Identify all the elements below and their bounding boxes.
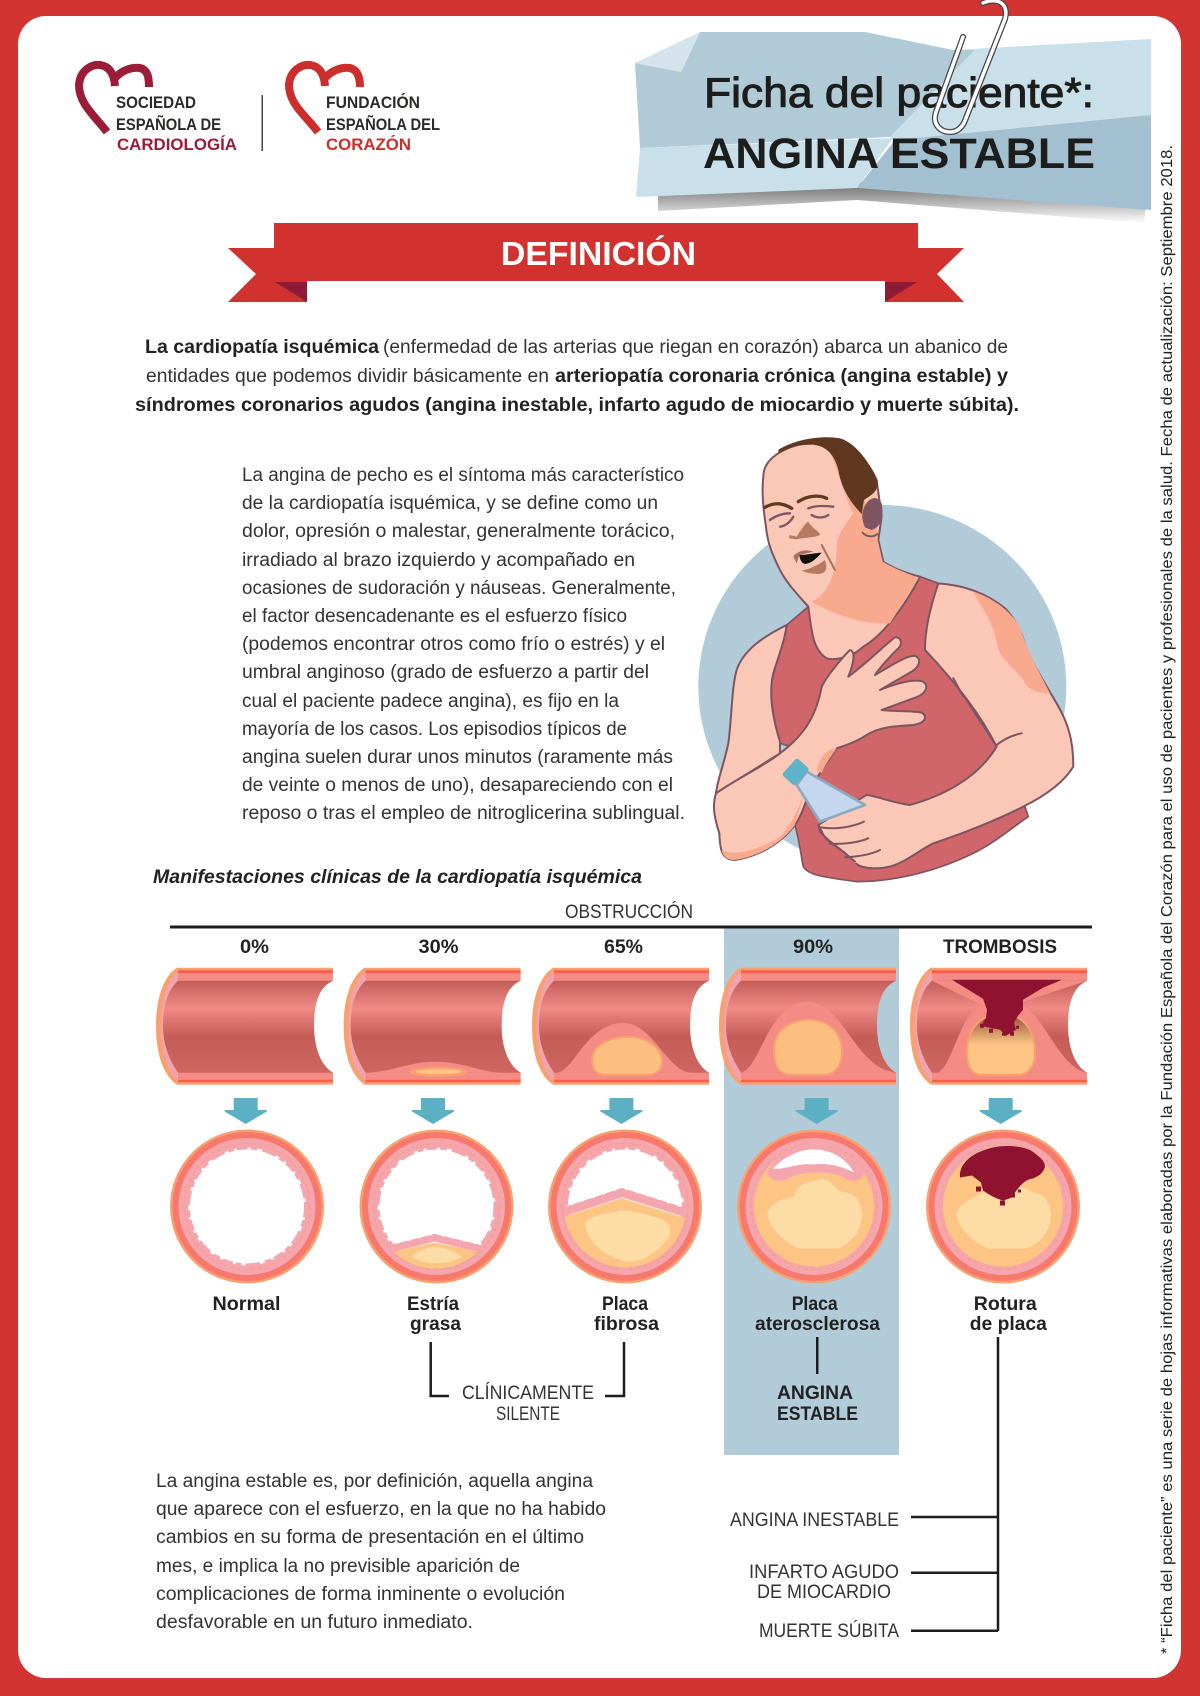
bracket: clinically silent: CLÍNICAMENTE: [462, 1383, 594, 1404]
text block: angina de pecho: de la cardiopatía isquémica, y se define como un: [242, 493, 658, 514]
logo: Sociedad Española de Cardiología: [79, 65, 237, 154]
text block: angina de pecho: reposo o tras el empleo de nitroglicerina sublingual.: [242, 803, 685, 824]
bracket: clinically silent: [431, 1342, 624, 1425]
stage labels: grasa: [410, 1314, 461, 1335]
stage labels: Placa: [792, 1294, 838, 1315]
stage labels: Rotura: [974, 1294, 1037, 1315]
cross section: fibrous plaque: [548, 1130, 702, 1284]
intro text block: La cardiopatía isquémica: [145, 337, 379, 358]
cross section: plaque rupture: [926, 1130, 1080, 1284]
artery section: atherosclerotic plaque: [719, 968, 896, 1085]
arrows from sections to cross sections: [225, 1098, 1022, 1124]
head and chest: [763, 441, 920, 659]
rupture outcomes tree: DE MIOCARDIO: [757, 1582, 891, 1603]
text block: angina de pecho: cual el paciente padece angina), es fijo en la: [242, 691, 619, 712]
intro text block: síndromes coronarios agudos (angina inestable, infarto agudo de miocardio y muerte súbita).: [135, 395, 1019, 416]
intro text block: arteriopatía coronaria crónica (angina estable) y: [555, 366, 1008, 387]
forearm and hand on chest: [714, 637, 926, 860]
text block: angina de pecho: de veinte o menos de uno), desapareciendo con el: [242, 775, 673, 796]
stage labels: de placa: [970, 1314, 1047, 1335]
artery section: fatty streak: [344, 968, 521, 1085]
obstruction percentages: TROMBOSIS: [943, 937, 1057, 958]
title line 1: Ficha del paciente*:: [704, 69, 1094, 116]
rupture outcomes tree: INFARTO AGUDO: [749, 1562, 899, 1583]
stage labels: Placa: [602, 1294, 648, 1315]
heading ribbon: Definición: DEFINICIÓN: [501, 235, 696, 272]
obstruction percentages: 65%: [604, 937, 643, 958]
stage labels: fibrosa: [594, 1314, 659, 1335]
obstruction percentages: 90%: [793, 937, 833, 958]
text block: angina de pecho: ocasiones de sudoración y náuseas. Generalmente,: [242, 578, 676, 599]
text block: angina estable: que aparece con el esfuerzo, en la que no ha habido: [156, 1499, 606, 1520]
text block: angina de pecho: (podemos encontrar otros como frío o estrés) y el: [242, 634, 665, 655]
stable angina outcome: ANGINA: [777, 1383, 853, 1404]
obstruction percentages: 0%: [240, 937, 269, 958]
intro text block: entidades que podemos dividir básicamente en: [146, 366, 549, 387]
artery section: thrombosis: [910, 968, 1087, 1085]
chart heading: Manifestaciones clínicas de la cardiopatía isquémica: [153, 866, 642, 888]
label: obstrucción: OBSTRUCCIÓN: [565, 901, 693, 923]
heading ribbon: Definición: [228, 223, 964, 302]
text block: angina estable: La angina estable es, por definición, aquella angina: [156, 1471, 593, 1492]
artery section: normal: [156, 968, 333, 1085]
rupture outcomes tree: [730, 1337, 998, 1642]
logo: Sociedad Española de Cardiología: CARDIOLOGÍA: [117, 135, 237, 154]
bracket: clinically silent: SILENTE: [496, 1404, 560, 1425]
hair: [778, 437, 878, 514]
text block: angina estable: cambios en su forma de presentación en el último: [156, 1527, 584, 1548]
logo: Sociedad Española de Cardiología: ESPAÑOLA DE: [116, 114, 221, 134]
stable angina outcome: [777, 1337, 858, 1425]
artery section: fibrous plaque: [532, 968, 709, 1085]
tank top: [770, 577, 1028, 882]
stage labels: Estría: [407, 1294, 459, 1315]
text block: angina de pecho: mayoría de los casos. Los episodios típicos de: [242, 719, 627, 740]
text block: angina estable: mes, e implica la no previsible aparición de: [156, 1556, 520, 1577]
stage labels: Normal: [212, 1294, 280, 1315]
logo: Fundación Española del Corazón: CORAZÓN: [326, 135, 411, 154]
obstruction percentages: 30%: [418, 937, 459, 958]
title card: folded paper: [635, 32, 1151, 223]
illustration: man with chest pain holding a bottle: [698, 437, 1073, 882]
text block: angina de pecho: irradiado al brazo izquierdo y acompañado en: [242, 550, 635, 571]
rupture outcomes tree: ANGINA INESTABLE: [730, 1510, 899, 1531]
logo: Fundación Española del Corazón: ESPAÑOLA DEL: [326, 114, 440, 134]
intro text block: (enfermedad de las arterias que riegan en corazón) abarca un abanico de: [383, 337, 1008, 358]
right arm: [818, 583, 1073, 868]
cross section: atherosclerotic plaque: [737, 1130, 891, 1284]
icon: paper clip: [935, 1, 1006, 132]
cross section: fatty streak: [360, 1130, 514, 1284]
obstruction axis: [170, 926, 1092, 928]
logo: Sociedad Española de Cardiología: SOCIEDAD: [116, 93, 196, 112]
logo: Fundación Española del Corazón: [289, 65, 440, 154]
highlight column: 90%: [724, 928, 899, 1455]
face features: [765, 496, 835, 570]
logo: Fundación Española del Corazón: FUNDACIÓN: [326, 93, 420, 112]
rupture outcomes tree: MUERTE SÚBITA: [759, 1620, 899, 1642]
logo divider: [262, 95, 263, 151]
text block: angina de pecho: dolor, opresión o malestar, generalmente torácico,: [242, 521, 675, 542]
intro text block: [135, 337, 1019, 416]
text block: angina de pecho: umbral anginoso (grado de esfuerzo a partir del: [242, 662, 649, 683]
text block: angina estable: complicaciones de forma inminente o evolución: [156, 1584, 565, 1605]
side note: vertical text: * “Ficha del paciente” es una serie de hojas informativas elaboradas por la Fundación Española del Corazón para el uso de pacientes y profesionales de la salud. Fecha de actualización: Septiembre 2018.: [1159, 145, 1176, 1654]
text block: angina de pecho: La angina de pecho es el síntoma más característico: [242, 465, 684, 486]
stage labels: aterosclerosa: [755, 1314, 880, 1335]
obstruction percentages: [240, 937, 1057, 958]
ear: [862, 498, 882, 530]
title line 2: ANGINA ESTABLE: [703, 130, 1095, 178]
text block: angina de pecho: el factor desencadenante es el esfuerzo físico: [242, 606, 627, 627]
bottle: [797, 772, 865, 822]
stable angina outcome: ESTABLE: [777, 1404, 858, 1425]
lower hand fingers: [820, 810, 880, 863]
text block: angina estable: [156, 1471, 606, 1633]
upper arm: [716, 625, 787, 793]
text block: angina de pecho: [242, 465, 685, 824]
cross section: normal: [170, 1130, 324, 1284]
text block: angina de pecho: angina suelen durar unos minutos (raramente más: [242, 747, 673, 768]
text block: angina estable: desfavorable en un futuro inmediato.: [156, 1612, 473, 1633]
stage labels: [212, 1294, 1047, 1335]
